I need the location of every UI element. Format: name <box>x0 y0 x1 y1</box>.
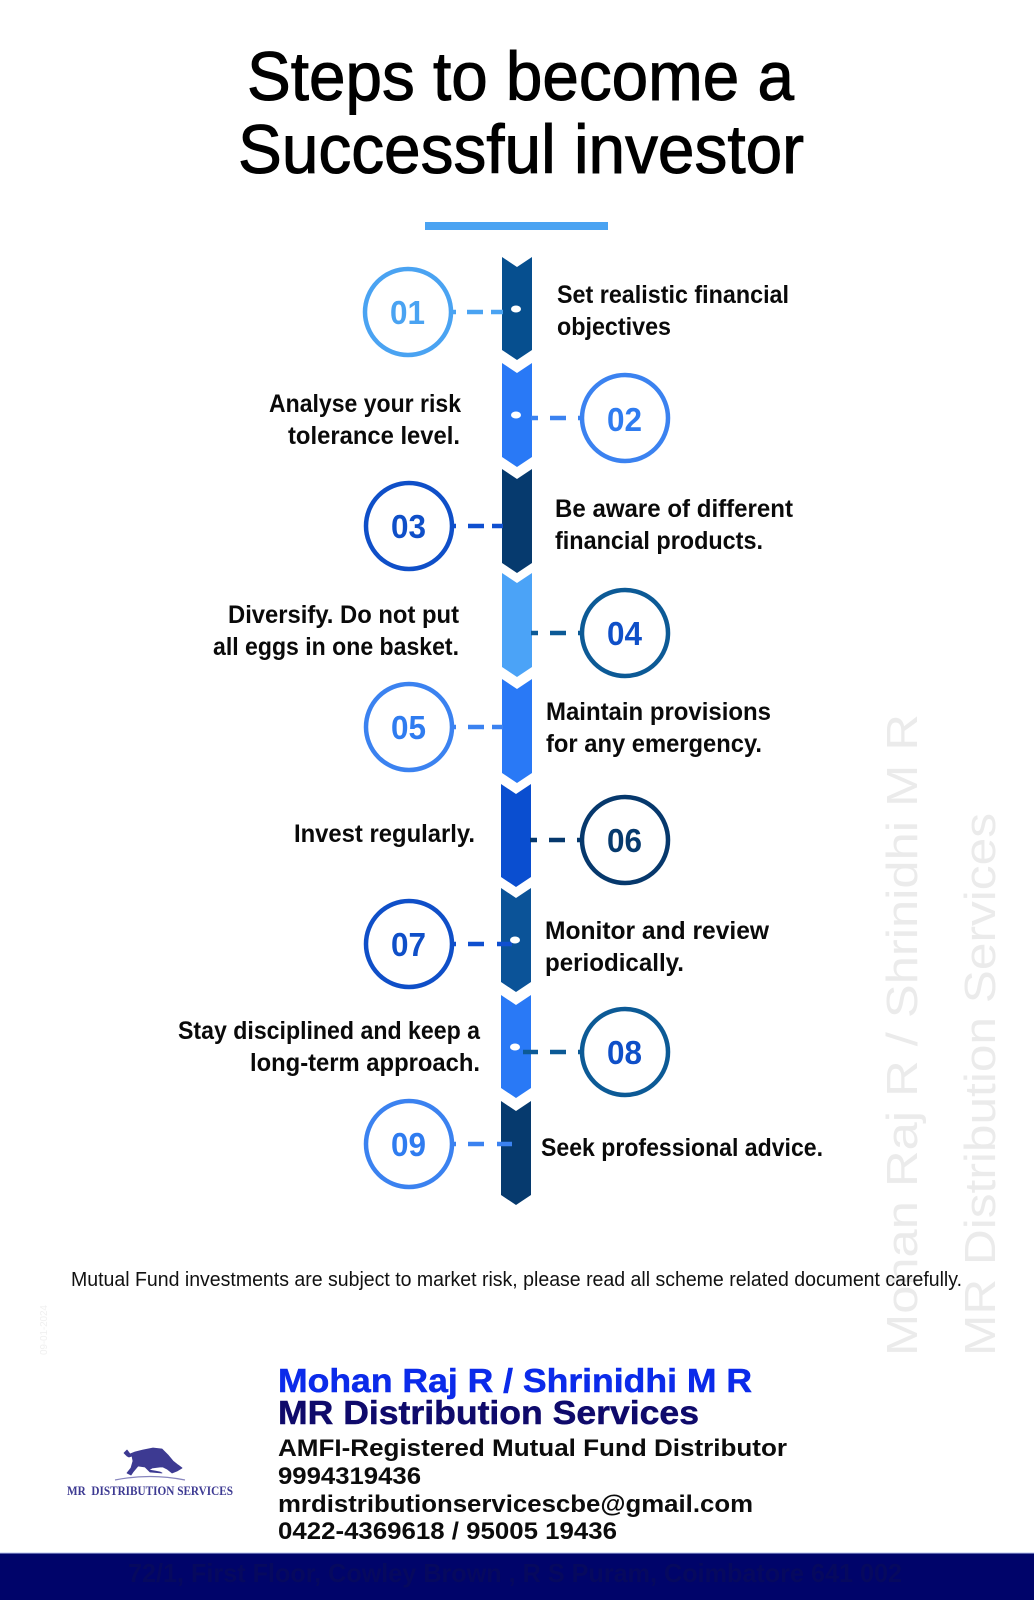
chevron 03 <box>502 469 532 573</box>
text 08: long-term approach. <box>250 1049 480 1077</box>
text 03: Be aware of different <box>555 495 794 523</box>
step 07 <box>366 888 770 992</box>
text 01: Set realistic financial <box>557 281 789 309</box>
step 01 <box>365 257 789 360</box>
footer band with address: 72/1, First Floor, Cowley Brown , R S Puram, Coimbatore 641 002 <box>128 1558 902 1588</box>
number 07: 07 <box>391 926 426 963</box>
connector 04 <box>531 631 583 635</box>
dot 08 <box>510 1044 520 1050</box>
circle 04 <box>582 590 668 676</box>
number 03: 03 <box>391 508 426 545</box>
text 09: Seek professional advice. <box>541 1134 823 1162</box>
circle 02 <box>582 375 668 461</box>
circle 03 <box>366 483 452 569</box>
text 05 <box>546 698 771 758</box>
text 07: periodically. <box>545 949 684 977</box>
connector 01 <box>453 310 503 314</box>
connector 02 <box>531 416 583 420</box>
connector 03 <box>453 524 503 528</box>
watermark: vertical names <box>878 714 1005 1356</box>
title underline bar <box>425 222 608 230</box>
circle 09 <box>366 1101 452 1187</box>
circle 05 <box>366 684 452 770</box>
text 02 <box>269 390 461 450</box>
text 08 <box>178 1017 481 1077</box>
dot 02 <box>511 412 521 418</box>
number 06: 06 <box>607 822 642 859</box>
chevron 04 <box>502 573 532 677</box>
footer band with address <box>0 1552 1034 1600</box>
title: Successful investor <box>238 111 804 188</box>
step 03 <box>366 469 794 573</box>
title <box>238 38 804 188</box>
chevron 02 <box>502 363 532 467</box>
text 07 <box>545 917 770 977</box>
contact block <box>278 1362 787 1545</box>
chevron 01 <box>502 257 532 360</box>
connector 05 <box>453 725 503 729</box>
chevron 09 <box>501 1101 531 1205</box>
chevron 08 <box>501 995 531 1098</box>
text 03: financial products. <box>555 527 763 555</box>
text 05: Maintain provisions <box>546 698 771 726</box>
distributor names: Mohan Raj R / Shrinidhi M R <box>278 1362 752 1399</box>
faint date stamp: 09-01-2024 <box>39 1305 50 1355</box>
logo text: MR DISTRIBUTION SERVICES <box>67 1483 233 1498</box>
step 08 <box>178 995 668 1098</box>
text 06: Invest regularly. <box>294 820 475 848</box>
step 09 <box>366 1101 823 1205</box>
text 04: Diversify. Do not put <box>228 601 460 629</box>
circle 07 <box>366 901 452 987</box>
dot 01 <box>511 306 521 312</box>
connector 06 <box>530 838 582 842</box>
ground arc <box>115 1476 185 1480</box>
circle 08 <box>582 1009 668 1095</box>
connector 09 <box>453 1142 512 1146</box>
watermark: vertical names: MR Distribution Services <box>956 813 1005 1356</box>
step 02 <box>269 363 668 467</box>
text 05: for any emergency. <box>546 730 762 758</box>
chevron 07 <box>501 888 531 992</box>
chevron 06 <box>501 784 531 887</box>
number 08: 08 <box>607 1034 642 1071</box>
text 01: objectives <box>557 313 671 341</box>
number 02: 02 <box>607 401 642 438</box>
number 05: 05 <box>391 709 426 746</box>
text 02: tolerance level. <box>288 422 460 450</box>
number 09: 09 <box>391 1126 426 1163</box>
phone numbers: 0422-4369618 / 95005 19436 <box>278 1518 617 1545</box>
text 07: Monitor and review <box>545 917 770 945</box>
circle 06 <box>582 797 668 883</box>
watermark: vertical names: Mohan Raj R / Shrinidhi M R <box>878 714 927 1356</box>
connector 08 <box>523 1050 583 1054</box>
company name: MR Distribution Services <box>278 1394 699 1431</box>
step 04 <box>213 573 668 677</box>
text 01 <box>557 281 789 341</box>
connector 07 <box>453 942 512 946</box>
email: mrdistributionservicescbe@gmail.com <box>278 1491 753 1518</box>
chevron 05 <box>502 679 532 783</box>
step 06 <box>294 784 668 887</box>
number 04: 04 <box>607 615 643 652</box>
text 03 <box>555 495 794 555</box>
title: Steps to become a <box>247 38 795 115</box>
text 08: Stay disciplined and keep a <box>178 1017 481 1045</box>
phone: 9994319436 <box>278 1463 421 1490</box>
icon: bull <box>124 1448 182 1475</box>
dot 07 <box>510 936 520 944</box>
step 05 <box>366 679 771 783</box>
circle 01 <box>365 269 451 355</box>
text 04 <box>213 601 460 661</box>
text 04: all eggs in one basket. <box>213 633 459 661</box>
disclaimer: Mutual Fund investments are subject to market risk, please read all scheme related document carefully. <box>71 1269 962 1291</box>
text 02: Analyse your risk <box>269 390 461 418</box>
logo: bull and company name <box>67 1448 233 1498</box>
registration line: AMFI-Registered Mutual Fund Distributor <box>278 1435 787 1462</box>
number 01: 01 <box>390 294 425 331</box>
